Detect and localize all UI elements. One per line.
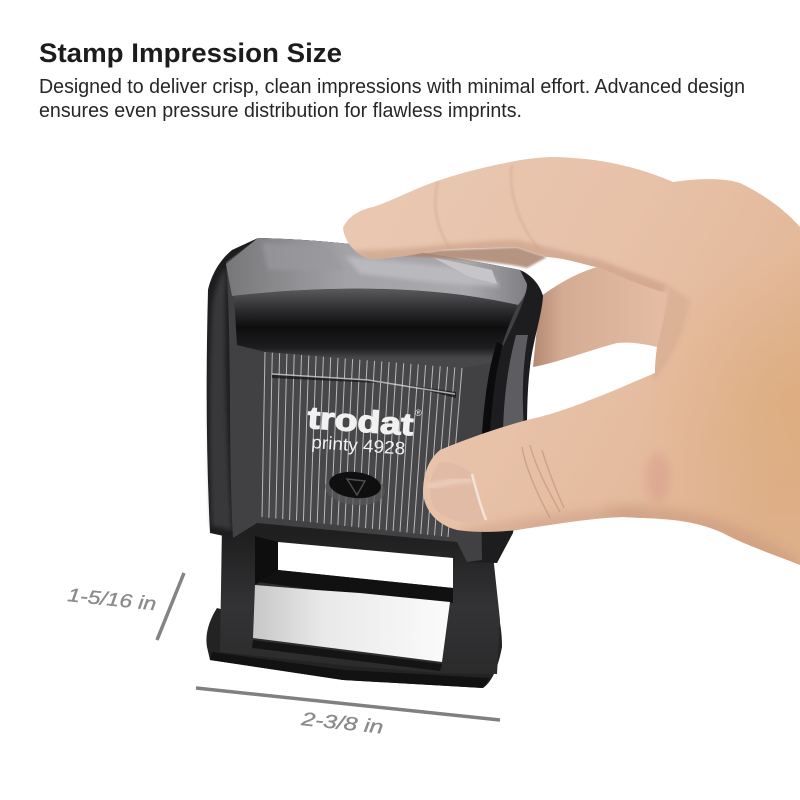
width label: 2-3/8 in — [299, 709, 384, 739]
lower window — [253, 585, 450, 662]
skin shading — [350, 240, 800, 590]
cap top — [226, 238, 527, 305]
thumb button — [323, 469, 387, 508]
front ribbed panel — [262, 352, 462, 537]
stamp base — [206, 608, 502, 688]
panel ribs — [262, 352, 462, 537]
index finger shadow on stamp — [400, 247, 547, 268]
trodat logo: printy 4928 — [311, 432, 406, 459]
description text: ensures even pressure distribution for flawless imprints. — [39, 100, 522, 122]
hand silhouette — [343, 157, 800, 565]
width dimension line — [196, 688, 500, 720]
right side reflection — [480, 342, 503, 470]
index finger creases — [435, 165, 540, 250]
panel reflection — [272, 374, 456, 398]
height dimension line — [157, 573, 184, 640]
hand: middle finger behind stamp — [533, 267, 680, 367]
trodat logo: ® — [415, 408, 422, 418]
upper window — [278, 542, 453, 588]
stamp body — [207, 238, 543, 563]
description text: Designed to deliver crisp, clean impressions with minimal effort. Advanced design — [39, 76, 745, 98]
stamp frame legs — [220, 510, 500, 674]
thumbnail — [430, 462, 486, 523]
thumb knuckle creases — [522, 445, 564, 518]
description text — [39, 76, 745, 122]
hand: index finger, palm and thumb — [343, 157, 800, 590]
black cross bar — [258, 570, 453, 603]
title: Stamp Impression Size — [39, 38, 342, 68]
trodat logo — [307, 400, 422, 459]
trodat logo: trodat — [307, 400, 415, 442]
thumb joint redness — [646, 453, 670, 503]
height label: 1-5/16 in — [66, 585, 157, 615]
cap highlight — [262, 243, 345, 270]
stamp — [206, 238, 543, 688]
left side highlight — [210, 268, 232, 530]
translucent front shell — [226, 238, 527, 562]
dark band — [234, 289, 518, 368]
